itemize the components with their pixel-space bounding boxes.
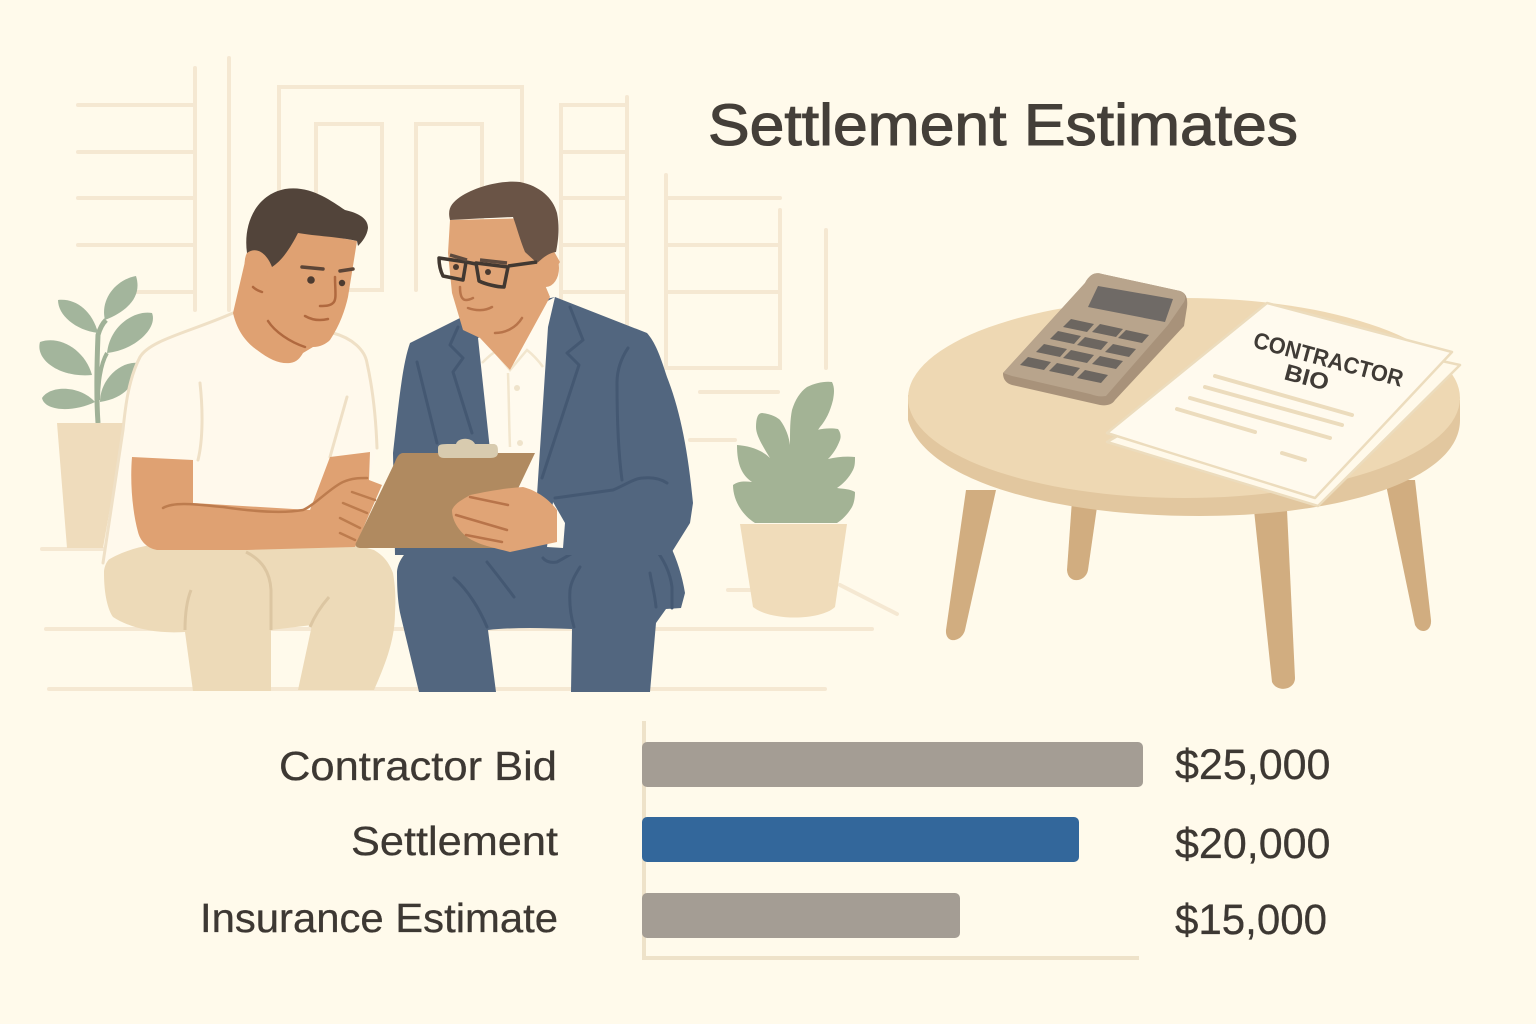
dress shirt	[478, 297, 555, 495]
jacket	[393, 297, 693, 555]
icon: calculator	[1003, 273, 1187, 405]
glasses	[439, 258, 537, 287]
neck and face	[448, 218, 560, 370]
icon: man in white t-shirt	[103, 188, 395, 691]
neck and face	[233, 230, 357, 363]
icon: contractor bio document	[1107, 303, 1460, 506]
hand	[452, 487, 557, 552]
label: insurance estimate: Insurance Estimate	[200, 895, 558, 941]
label: settlement: Settlement	[351, 818, 559, 864]
trousers	[104, 540, 395, 691]
bar: contractor bid	[642, 742, 1143, 787]
bar: settlement	[642, 817, 1079, 862]
title: Settlement Estimates	[708, 93, 1298, 158]
suit trousers	[397, 534, 685, 692]
icon: man in navy suit with glasses	[393, 182, 693, 692]
t-shirt	[103, 313, 377, 563]
icon: left potted plant	[39, 276, 153, 548]
arms	[131, 452, 382, 550]
hair	[246, 188, 368, 267]
cuff	[547, 502, 565, 548]
value: insurance estimate: $15,000	[1175, 896, 1327, 944]
icon: right potted plant	[733, 382, 855, 618]
value: contractor bid: $25,000	[1175, 741, 1330, 789]
hair	[449, 182, 559, 263]
icon: contractor bio document: BIO	[1282, 359, 1332, 395]
icon: round table	[908, 298, 1460, 689]
icon: clipboard and hand	[356, 439, 565, 552]
value: settlement: $20,000	[1175, 820, 1330, 868]
bar chart	[200, 721, 1330, 958]
label: contractor bid: Contractor Bid	[279, 743, 557, 789]
icon: contractor bio document: CONTRACTOR	[1251, 327, 1407, 392]
bar: insurance estimate	[642, 893, 960, 938]
